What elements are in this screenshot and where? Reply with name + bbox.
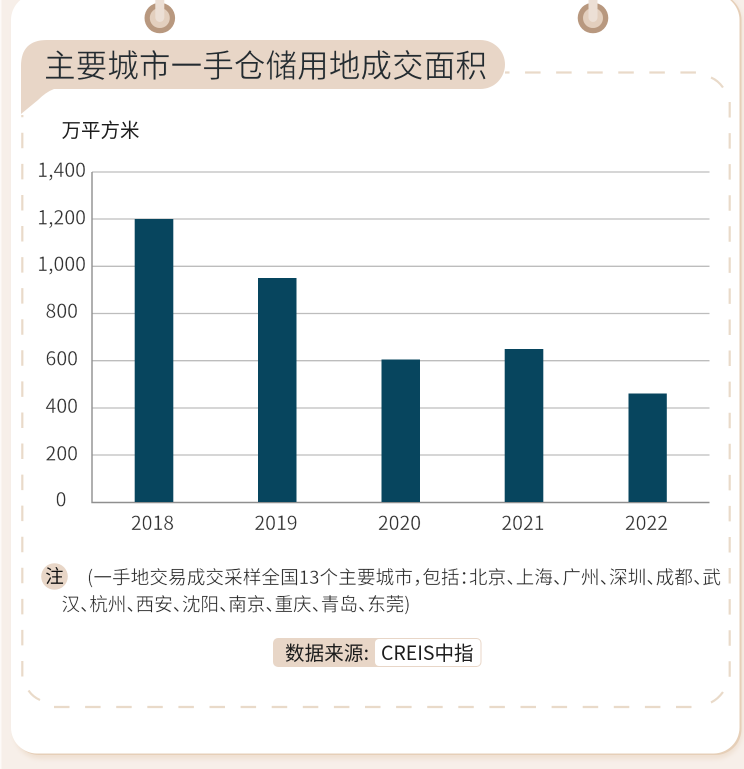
y axis labels: 1,000 <box>37 248 86 277</box>
bars <box>135 219 667 502</box>
x axis labels: 2022 <box>625 507 668 536</box>
note text <box>62 563 721 617</box>
title banner <box>21 40 505 114</box>
x axis labels: 2019 <box>254 507 298 536</box>
y axis labels: 0 <box>56 484 66 513</box>
note badge <box>41 563 68 590</box>
source tag <box>273 637 482 667</box>
note text: 汉、杭州、西安、沈阳、南京、重庆、青岛、东莞) <box>62 590 410 617</box>
x axis labels: 2020 <box>378 507 421 536</box>
icon: left binder ring <box>144 0 175 33</box>
x axis labels: 2018 <box>131 507 174 536</box>
y axis labels: 200 <box>46 438 78 466</box>
y axis labels <box>37 154 86 513</box>
axes <box>92 172 710 502</box>
note text: (一手地交易成交采样全国13个主要城市，包括：北京、上海、广州、深圳、成都、武 <box>87 563 721 590</box>
y axis labels: 1,400 <box>37 154 86 183</box>
grid lines <box>92 172 710 455</box>
bar chart <box>37 154 710 536</box>
x axis labels <box>131 507 668 536</box>
icon: right binder ring <box>578 0 608 33</box>
y axis labels: 400 <box>46 390 78 419</box>
y axis labels: 1,200 <box>37 201 86 230</box>
y axis labels: 600 <box>46 343 78 372</box>
unit label: 万平方米 <box>62 114 140 143</box>
y axis labels: 800 <box>46 295 78 324</box>
dashed inner frame <box>22 72 730 707</box>
x axis labels: 2021 <box>501 507 545 536</box>
source tag: 数据来源: <box>285 637 369 666</box>
note badge: 注 <box>45 563 64 589</box>
title banner: 主要城市一手仓储用地成交面积 <box>44 41 487 87</box>
source tag: CREIS中指 <box>381 637 474 666</box>
